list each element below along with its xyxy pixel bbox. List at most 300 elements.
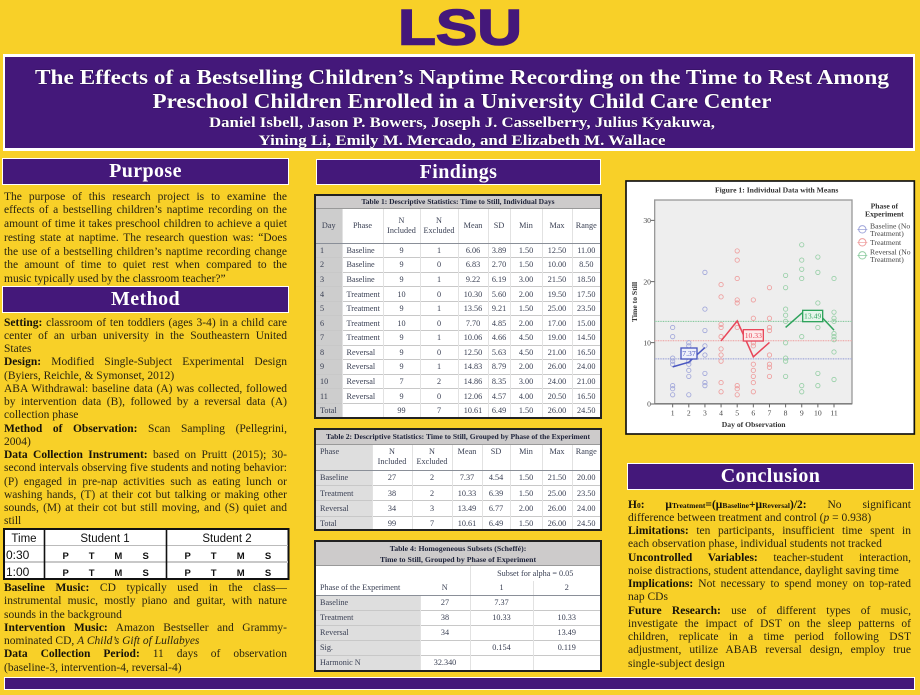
observation table: students — [3, 528, 290, 580]
table 1 data: 10 — [320, 377, 328, 386]
table 1 data: 10 — [397, 290, 406, 299]
table 1 data: Treatment — [346, 304, 380, 313]
observation table: students: T — [89, 551, 95, 562]
heading: Conclusion: Conclusion — [721, 465, 820, 487]
x axis labels: 6 — [751, 408, 755, 417]
table 1 data: 1.50 — [519, 304, 533, 313]
table 1 data: 12.50 — [548, 246, 566, 255]
table 1 data: 12.50 — [464, 348, 482, 357]
table 1 data: 2.00 — [519, 319, 533, 328]
y axis labels: 0 — [647, 400, 651, 409]
table 4 data: 0.119 — [558, 643, 576, 652]
table 4 data: 27 — [441, 598, 449, 607]
table 2 data: Included — [378, 456, 406, 466]
table 1 data: SD — [494, 221, 504, 230]
table 2 data: Reversal — [320, 504, 349, 513]
table 1 data: 16.50 — [577, 348, 595, 357]
x axis labels: 4 — [719, 408, 723, 417]
text: conclusion: investigate the impact of DST on the sleep patterns of — [628, 618, 911, 630]
observation table: students: M — [114, 551, 122, 562]
text: conclusion: single-subject design — [628, 658, 725, 670]
table 1 data: 4 — [320, 290, 324, 299]
table 2 data: Min — [519, 447, 533, 456]
table 1 data: 14.86 — [464, 377, 482, 386]
table 1 data: 16.50 — [577, 392, 595, 401]
legend: Reversal (No — [870, 247, 911, 256]
mean label: reversal — [803, 310, 823, 322]
table 1 data: Reversal — [346, 392, 375, 401]
axis title: time to still: Time to Still — [630, 282, 639, 322]
table 1 data: 1 — [320, 246, 324, 255]
footer bar — [4, 677, 915, 690]
table 2 data: 6.39 — [489, 489, 503, 498]
text: conclusion: nap CDs — [628, 591, 668, 603]
table 1 data: 99 — [397, 406, 406, 415]
table 1 data: 19.50 — [548, 290, 566, 299]
y axis labels — [643, 216, 651, 409]
observation table: students: M — [237, 551, 245, 562]
treatment data points — [719, 249, 772, 397]
table 1 data: Mean — [464, 221, 482, 230]
table 1 data: 10 — [397, 319, 406, 328]
table 1 data: 4.85 — [492, 319, 506, 328]
title banner — [3, 54, 915, 151]
table 1 data: 10.61 — [464, 406, 482, 415]
table 2 data: 1.50 — [519, 489, 533, 498]
table 2 data: Treatment — [320, 489, 353, 498]
table 1 data: 9 — [399, 260, 404, 269]
table 1 data: 20.50 — [548, 392, 566, 401]
table 1 data: Baseline — [346, 246, 375, 255]
table 1 data: 6.06 — [466, 246, 480, 255]
table 1 data: 17.00 — [548, 319, 566, 328]
text: method details — [4, 316, 287, 527]
authors line 1: Daniel Isbell, Jason P. Bowers, Joseph J. Casselberry, Julius Kyakuwa, — [209, 115, 715, 131]
table 2 data: Mean — [458, 447, 476, 456]
table 1 data — [316, 209, 600, 417]
table 1 data: 2.00 — [519, 362, 533, 371]
table 1 data: 7.70 — [466, 319, 480, 328]
observation table: students: P — [185, 551, 192, 562]
table 1 data: 5.63 — [492, 348, 506, 357]
table 1 data: 3.00 — [519, 377, 533, 386]
table 1 data: 8.50 — [579, 260, 593, 269]
text: method details: (Byiers, Reichle, & Symonset, 2012) — [4, 370, 174, 382]
text: method details: Setting: classroom of ten toddlers (ages 3-4) in a child care — [4, 316, 287, 328]
table 1 data: Max — [549, 221, 564, 230]
table 2 data: 24.50 — [577, 519, 595, 528]
text: conclusion: Uncontrolled Variables: teacher-student interaction, — [628, 552, 911, 564]
table 2 data: SD — [491, 447, 501, 456]
table 1 data: 21.00 — [548, 348, 566, 357]
legend: Treatment — [870, 238, 902, 247]
table 1 data: 1 — [437, 333, 441, 342]
table 1 data: 24.00 — [548, 377, 566, 386]
y axis labels: 30 — [643, 216, 651, 225]
mean reference lines — [655, 321, 852, 359]
mean label: reversal: 13.49 — [804, 312, 821, 321]
text: conclusion: noise distractions, student attendance, daylight saving time — [628, 565, 899, 577]
table 4 data: Baseline — [320, 598, 348, 607]
table 1 data: 7 — [437, 406, 441, 415]
table 1 data: 1 — [437, 304, 441, 313]
table 2 data: 38 — [388, 489, 396, 498]
table 1 data: 0 — [437, 348, 441, 357]
observation table: students: S — [143, 551, 149, 562]
table 4 data: Subset for alpha = 0.05 — [497, 569, 573, 578]
table 2 data: 21.50 — [548, 473, 566, 482]
table 1 data: 19.00 — [548, 333, 566, 342]
text: conclusion: Implications: Not necessary to spend money on top-rated — [628, 578, 911, 590]
table 1 data: Treatment — [346, 319, 380, 328]
table 1 data: 21.50 — [548, 275, 566, 284]
legend: Treatment) — [870, 255, 904, 264]
table 1 data: 13.56 — [464, 304, 482, 313]
text: purpose: amount of time it takes preschool children to achieve a quiet — [4, 218, 287, 230]
x axis labels: 10 — [814, 408, 822, 417]
table 4 title: Table 4: Homogeneous Subsets (Scheffé): — [390, 544, 526, 553]
figure 1: individual data with means — [625, 180, 916, 435]
x axis labels: 9 — [800, 408, 804, 417]
table 2 data: 2 — [430, 473, 434, 482]
table 1 data: Treatment — [346, 290, 380, 299]
text: music and data collection: Data Collection Period: 11 days of observation — [4, 648, 287, 660]
text: method details: (P) engaged in pre-nap activities such as eating lunch or — [4, 476, 287, 488]
text: conclusion: Future Research: use of different types of music, — [628, 605, 911, 617]
table 1: individual days — [314, 194, 602, 419]
text: conclusion: H0: μTreatment=(μBaseline+μReversal)/2: No significant — [628, 498, 911, 510]
observation table: students: T — [89, 568, 95, 579]
table 2 title — [316, 430, 600, 445]
table 4 data: 7.37 — [494, 598, 509, 607]
table 2 data: 26.00 — [548, 519, 566, 528]
table 2 data: 6.49 — [489, 519, 503, 528]
daily mean lines — [673, 313, 834, 367]
table 4 data: 10.33 — [558, 613, 576, 622]
table 1 data: 9 — [399, 304, 404, 313]
table 1 data: Treatment — [346, 333, 380, 342]
table 1 data: 15.00 — [577, 319, 595, 328]
observation table: students: M — [114, 568, 122, 579]
observation table: students: M — [237, 568, 245, 579]
table 1 data: 5 — [320, 304, 324, 313]
table 1 data: 10.06 — [464, 333, 482, 342]
table 4 data: N — [442, 583, 448, 592]
x axis labels: 2 — [687, 408, 691, 417]
heading: Method — [2, 286, 289, 313]
table 1 data: 6.49 — [492, 406, 506, 415]
table 1 data: N — [436, 216, 442, 225]
table 2 data: 25.00 — [548, 489, 566, 498]
table 2 data: 10.33 — [458, 489, 476, 498]
legend: Experiment — [865, 210, 904, 219]
table 4 data: Treatment — [320, 613, 353, 622]
text: method details: States — [4, 343, 31, 355]
table 2 data: 24.00 — [577, 504, 595, 513]
table 1 data: 0 — [437, 290, 441, 299]
mean label: treatment: 10.33 — [745, 331, 762, 340]
table 4 data: 0.154 — [492, 643, 511, 652]
x axis labels: 5 — [735, 408, 739, 417]
text: method details: sounds, (M) at their cot but still moving, and (S) quiet and — [4, 502, 287, 514]
table 2 data: 1.50 — [519, 519, 533, 528]
legend: Phase of — [871, 202, 898, 211]
observation table: students: Student 2 — [202, 533, 252, 545]
reversal data points — [783, 243, 836, 394]
text: music and data collection: nominated CD, A Child’s Gift of Lullabyes — [4, 635, 199, 647]
text: purpose: the use of a bestselling children’s naptime recording change — [4, 246, 287, 258]
table 1 data: 23.50 — [577, 304, 595, 313]
table 1 data: 11.00 — [577, 246, 595, 255]
observation table: students: S — [265, 568, 271, 579]
table 1 data: 14.83 — [464, 362, 482, 371]
table 1 title: Table 1: Descriptive Statistics: Time to Still, Individual Days — [361, 197, 554, 206]
table 4 data: 1 — [499, 583, 504, 592]
x axis labels: 8 — [784, 408, 788, 417]
table 2: by phase — [314, 428, 602, 531]
table 4: homogeneous subsets — [314, 540, 602, 672]
title line 2: Preschool Children Enrolled in a University Child Care Center — [152, 89, 772, 113]
x axis labels: 11 — [830, 408, 838, 417]
axis title: day of observation: Day of Observation — [722, 420, 786, 429]
table 1 data: 7 — [320, 333, 324, 342]
table 4 data: 34 — [441, 628, 449, 637]
table 1 data: 11 — [320, 392, 328, 401]
table 1 data: 8 — [320, 348, 324, 357]
table 1 data: 10.00 — [548, 260, 566, 269]
mean label: baseline: 7.37 — [682, 349, 696, 358]
table 1 data: 1.50 — [519, 406, 533, 415]
observation table: students: T — [211, 551, 217, 562]
table 1 data: 10.30 — [464, 290, 482, 299]
table 2 data: Max — [549, 447, 564, 456]
title line 1: The Effects of a Bestselling Children’s Naptime Recording on the Time to Rest Among — [35, 65, 889, 89]
table 1 data: 2.00 — [519, 290, 533, 299]
text: purpose: resting state at naptime. The research question was: “Does — [4, 232, 287, 244]
table 2 data: 23.50 — [577, 489, 595, 498]
table 1 data: 0 — [437, 392, 441, 401]
table 1 data: 12.06 — [464, 392, 482, 401]
table 1 data: 3.89 — [492, 246, 506, 255]
table 1 data: 9 — [399, 392, 404, 401]
table 2 data: N — [429, 447, 435, 456]
observation table: students: Student 1 — [80, 533, 130, 545]
table 4 data: 2 — [565, 583, 569, 592]
observation table: students: Time — [11, 533, 37, 545]
table 1 data: 4.66 — [492, 333, 506, 342]
table 1 data: 21.00 — [577, 377, 595, 386]
table 2 data: 26.00 — [548, 504, 566, 513]
table 1 data: 26.00 — [548, 406, 566, 415]
heading: Findings — [316, 159, 601, 185]
table 1 data: 1 — [437, 275, 441, 284]
table 1 data: 2 — [320, 260, 324, 269]
table 2 data: Baseline — [320, 473, 348, 482]
heading: Conclusion — [627, 463, 914, 490]
observation table: students: S — [143, 568, 149, 579]
table 2 data: 6.77 — [489, 504, 503, 513]
table 4 data: 32.340 — [434, 658, 456, 667]
text: method details: Design: Modified Single-Subject Experimental Design — [4, 356, 287, 368]
text: method details: second intervals observing five students and noting behavior: — [4, 462, 287, 474]
text: purpose: effects of a bestselling children’s naptime recording on the — [4, 204, 287, 216]
x axis labels — [671, 408, 838, 417]
table 2 data: N — [389, 447, 395, 456]
table 2 data: Total — [320, 519, 337, 528]
table 2 data: 7.37 — [460, 473, 474, 482]
table 1 data: 18.50 — [577, 275, 595, 284]
table 1 data: Reversal — [346, 362, 375, 371]
table 1 data: 9 — [399, 333, 404, 342]
text: conclusion: Limitations: ten participants, insufficient time spent in — [628, 525, 911, 537]
table 2 data: 4.54 — [489, 473, 503, 482]
text: method details: collection phase — [4, 409, 78, 421]
table 1 data: 4.57 — [492, 392, 506, 401]
text: purpose — [4, 190, 287, 285]
table 1 data: 2 — [437, 377, 441, 386]
text: method details: still — [4, 515, 21, 527]
plot area — [630, 200, 852, 429]
legend — [857, 202, 911, 264]
mean label: baseline — [681, 348, 697, 359]
table 1 data: Reversal — [346, 348, 375, 357]
figure title: Figure 1: Individual Data with Means — [715, 186, 838, 195]
table 4 data: 13.49 — [558, 628, 576, 637]
table 1 data: 1.50 — [519, 246, 533, 255]
table 2 data: 99 — [388, 519, 396, 528]
text: purpose: music typically used by the classroom teacher?” — [4, 273, 226, 285]
table 1 data: 14.50 — [577, 333, 595, 342]
table 1 data: 4.50 — [519, 333, 533, 342]
table 2 data: 13.49 — [458, 504, 476, 513]
y axis labels: 20 — [643, 277, 651, 286]
text: music and data collection: sounds in the background — [4, 609, 122, 621]
table 1 data: 5.60 — [492, 290, 506, 299]
text: music and data collection: Baseline Music: CD typically used in the class— — [4, 582, 287, 594]
observation table: students: T — [211, 568, 217, 579]
table 4 data: 38 — [441, 613, 449, 622]
table 1 data: Total — [320, 406, 337, 415]
table 1 data: Baseline — [346, 275, 375, 284]
observation table: students: P — [185, 568, 192, 579]
heading: Findings: Findings — [420, 161, 497, 183]
table 1 data: N — [399, 216, 404, 225]
mean label: treatment — [743, 330, 763, 341]
table 1 data: Day — [322, 221, 336, 230]
table 1 data: Reversal — [346, 377, 375, 386]
text: method details: ABA Withdrawal: baseline data (A) was collected, followed — [4, 383, 287, 395]
baseline data points — [670, 270, 707, 397]
text: music and data collection: Intervention Music: Amazon Bestseller and Grammy- — [4, 622, 287, 634]
text: conclusion: difference between treatment and control (p = 0.938) — [628, 512, 871, 524]
table 1 data: 9 — [399, 275, 404, 284]
observation table: students: S — [265, 551, 271, 562]
table 2 data: 34 — [388, 504, 396, 513]
table 1 data: 7 — [399, 377, 404, 386]
table 1 data: 1 — [437, 362, 441, 371]
table 1 data: 9 — [320, 362, 324, 371]
table 1 data: 17.50 — [577, 290, 595, 299]
table 4 data: Phase of the Experiment — [320, 583, 400, 592]
legend: Treatment) — [870, 229, 904, 238]
table 1 data: Excluded — [424, 226, 454, 235]
table 1 data: 9 — [399, 362, 404, 371]
table 2 data: 10.61 — [458, 519, 476, 528]
legend: Baseline (No — [870, 221, 910, 230]
text: method details: washing hands, (T) at their cot but talking or making other — [4, 489, 287, 501]
table 1 data: 2.70 — [492, 260, 506, 269]
text: method details: center of an urban university in the Southeastern United — [4, 330, 287, 342]
table 2 data: 20.00 — [577, 473, 595, 482]
table 2 data: 2 — [430, 489, 434, 498]
table 1 data: 25.00 — [548, 304, 566, 313]
table 1 data: 6.83 — [466, 260, 480, 269]
text: purpose: The purpose of this research project is to examine the — [4, 190, 287, 202]
table 1 data: 1 — [437, 246, 441, 255]
table 1 data: Baseline — [346, 260, 375, 269]
table 1 data: 4.50 — [519, 348, 533, 357]
table 1 data: Phase — [353, 221, 372, 230]
heading: Method: Method — [111, 288, 180, 310]
text: conclusion — [628, 498, 911, 670]
table 1 data: 26.00 — [548, 362, 566, 371]
table 4 data — [316, 566, 600, 670]
table 1 data: 8.79 — [492, 362, 506, 371]
y axis labels: 10 — [643, 338, 651, 347]
table 1 data: Range — [576, 221, 597, 230]
text: music and data collection: (baseline-3, intervention-4, reversal-4) — [4, 662, 182, 674]
x axis labels: 3 — [703, 408, 707, 417]
observation table: students: 0:30 — [6, 548, 30, 562]
table 1 data: 3 — [320, 275, 324, 284]
table 1 data: 9 — [399, 246, 404, 255]
observation table: students: 1:00 — [6, 565, 30, 579]
text: method details: Data Collection Instrument: based on Pruitt (2015); 30- — [4, 449, 287, 461]
x axis labels: 7 — [768, 408, 772, 417]
table 1 title — [316, 196, 600, 209]
table 1 data: 4.00 — [519, 392, 533, 401]
table 1 data: 9 — [399, 348, 404, 357]
text: conclusion: each observation phase, individual students not tracked — [628, 538, 882, 550]
table 4 data: Reversal — [320, 628, 349, 637]
table 1 data: 9.21 — [492, 304, 506, 313]
table 2 data — [316, 445, 600, 529]
table 1 data: 3.00 — [519, 275, 533, 284]
table 2 title: Table 2: Descriptive Statistics: Time to Still, Grouped by Phase of the Experiment — [326, 432, 590, 441]
table 2 data: 7 — [430, 519, 434, 528]
text: method details: by intervention data (B), followed by a reversal data (A) — [4, 396, 287, 408]
table 2 data: 3 — [430, 504, 434, 513]
table 1 data: 8.35 — [492, 377, 506, 386]
observation table: students: P — [63, 568, 70, 579]
heading: Purpose — [2, 158, 289, 185]
text: purpose: the amount of time to quiet rest when compared to the — [4, 259, 287, 271]
text: music and data collection: instrumental music, mostly piano and guitar, with nature — [4, 595, 287, 607]
table 1 data: Min — [519, 221, 533, 230]
table 2 data: Excluded — [417, 456, 447, 466]
observation table: students: P — [63, 551, 70, 562]
text: method details: Method of Observation: Scan Sampling (Pellegrini, — [4, 423, 287, 435]
table 1 data: 0 — [437, 319, 441, 328]
x axis labels: 1 — [671, 408, 675, 417]
table 1 data: Included — [387, 226, 416, 235]
text: conclusion: children, replicate in a time period following DST — [628, 631, 911, 643]
table 4 title — [316, 542, 600, 566]
table 4 data: Harmonic N — [320, 658, 361, 667]
table 2 data: 1.50 — [519, 473, 533, 482]
table 1 data: 1.50 — [519, 260, 533, 269]
text: conclusion: adjustment, utilize ABAB reversal design, employ true — [628, 644, 911, 656]
